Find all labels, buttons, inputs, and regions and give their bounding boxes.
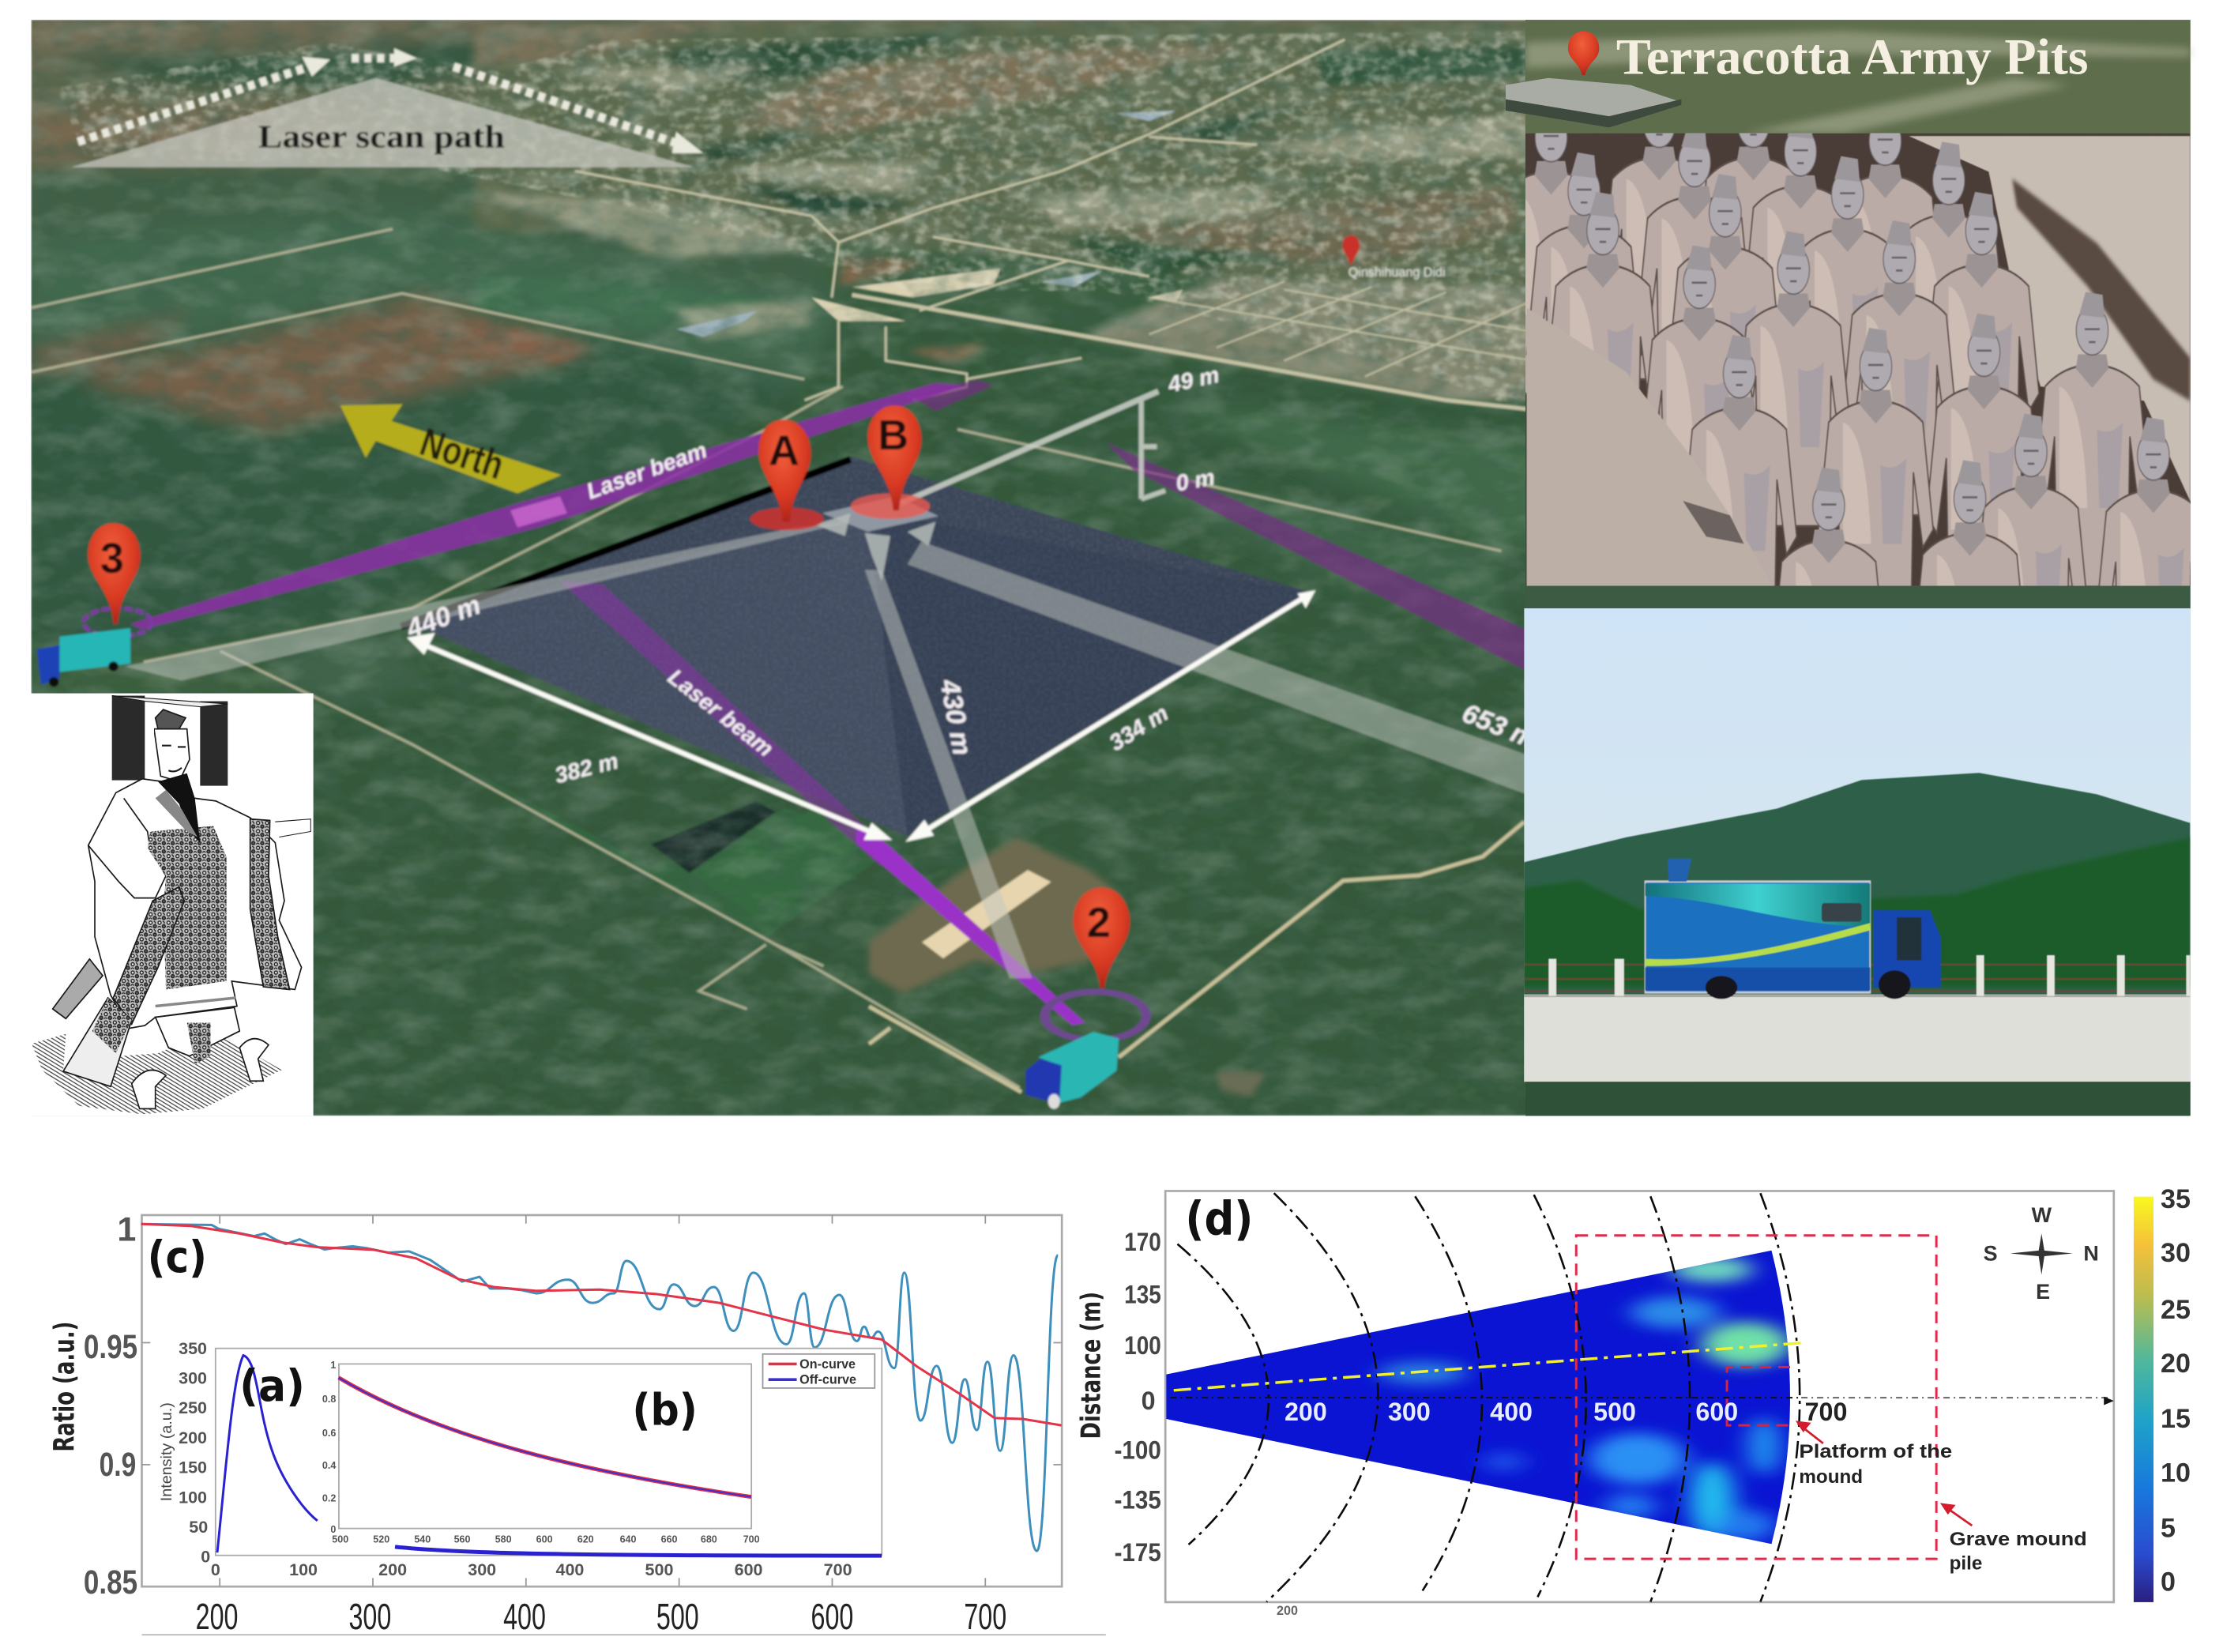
truck box	[1646, 882, 1870, 992]
compass: N	[2083, 1241, 2099, 1265]
pin B	[851, 405, 930, 519]
pin A: A	[769, 427, 799, 475]
inset a tick labels: 250	[179, 1398, 207, 1417]
terracotta title pin	[1568, 31, 1599, 75]
lower crop plots	[493, 784, 891, 935]
inset a tick labels	[179, 1339, 852, 1579]
mound top platform	[822, 496, 938, 532]
colorbar labels: 35	[2161, 1184, 2191, 1214]
inset b chart: 620	[577, 1534, 594, 1545]
inset b tick labels: 1	[330, 1360, 336, 1371]
chart c ticks	[141, 1215, 1062, 1586]
bottom rule	[141, 1634, 1106, 1635]
382 m dimension arrow	[408, 634, 890, 839]
train panel	[63, 998, 132, 1086]
pin B: B	[878, 412, 908, 459]
inset a tick labels: 0	[211, 1560, 220, 1579]
chart c panel letter: (c)	[148, 1232, 207, 1283]
satellite map background	[32, 20, 2191, 1116]
colorbar labels: 15	[2161, 1404, 2191, 1434]
chart d annotations: pile	[1950, 1553, 1982, 1575]
colorbar labels: 10	[2161, 1458, 2191, 1488]
Qinshihuang place marker: Qinshihuang Didi	[1348, 265, 1446, 280]
laser scan path	[71, 48, 703, 167]
compass: E	[2036, 1280, 2050, 1304]
inset b chart: 540	[414, 1534, 431, 1545]
compass: S	[1984, 1241, 1998, 1265]
colorbar labels: 0	[2161, 1567, 2176, 1597]
station 3 truck and pin	[37, 523, 152, 687]
upper right earth bank	[1909, 136, 2190, 501]
inset a signal curve	[217, 1356, 318, 1552]
inset legend: Off-curve	[799, 1373, 856, 1387]
front hem	[156, 1007, 239, 1056]
chart d y labels	[1115, 1228, 1161, 1567]
colorbar labels: 5	[2161, 1513, 2176, 1543]
inset b chart: 660	[661, 1534, 678, 1545]
station 2 airfield	[869, 822, 1524, 1097]
map labels: 0 m	[1174, 465, 1217, 497]
chart c axis labels: 600	[811, 1596, 853, 1637]
laser scan path: Laser scan path	[258, 119, 505, 155]
top strip over photos	[1525, 20, 2191, 134]
roads and town grid	[575, 40, 1757, 435]
bottom map strip	[1525, 1082, 2191, 1116]
beard	[158, 773, 200, 843]
inset a chart: Intensity (a.u.)	[158, 1402, 175, 1501]
inset b tick labels: 0.2	[322, 1493, 336, 1504]
compass	[1984, 1203, 2099, 1304]
station 2 truck and pin: 2	[1087, 899, 1111, 946]
upper farmland and town tones	[474, 24, 1534, 401]
robe body	[88, 779, 302, 1029]
chart c axis labels: 300	[348, 1596, 391, 1637]
inset b tick labels	[322, 1360, 336, 1535]
inset b chart	[321, 1349, 773, 1545]
chart c axis labels: Ratio (a.u.)	[48, 1322, 81, 1452]
chart c axis labels: 700	[964, 1596, 1006, 1637]
colorbar	[2134, 1197, 2153, 1602]
shoes	[132, 1070, 166, 1108]
inset a tick labels: 200	[378, 1560, 407, 1579]
chart d range labels: 400	[1490, 1398, 1533, 1426]
chart d y labels: -175	[1115, 1538, 1161, 1567]
map labels: Laser beam	[663, 664, 778, 762]
map labels: 653 m	[1458, 698, 1540, 755]
inset a tick labels: 300	[179, 1369, 207, 1388]
inset b tick labels: 0.4	[322, 1460, 336, 1471]
map labels: Laser beam	[583, 438, 710, 505]
chart d y labels: 0	[1142, 1387, 1156, 1415]
north arrow: North	[415, 420, 510, 487]
chart d axes lines	[1170, 1342, 2112, 1398]
chart d range labels	[1285, 1398, 1847, 1426]
chart d frame	[1165, 1191, 2114, 1602]
colorbar labels	[2161, 1184, 2191, 1597]
chart c axis labels: 0.95	[84, 1328, 137, 1366]
chart d range labels: 200	[1285, 1398, 1327, 1426]
inset a tick labels: 100	[179, 1488, 207, 1507]
crown panels	[112, 696, 228, 786]
chart c frame	[141, 1215, 1062, 1586]
beam arrowheads	[815, 514, 935, 581]
embroidered sleeve band	[250, 819, 290, 989]
inset b chart: 640	[620, 1534, 637, 1545]
chart d y labels: 170	[1124, 1228, 1161, 1256]
hem hatch	[32, 1034, 282, 1114]
north arrow	[340, 404, 562, 494]
emperor line drawing	[32, 694, 314, 1116]
Qinshihuang place marker	[1343, 235, 1446, 280]
roads left	[32, 229, 1502, 1088]
embroidered center	[148, 826, 227, 989]
inset a tick labels: 400	[556, 1560, 584, 1579]
chart d range labels: 700	[1805, 1398, 1847, 1426]
terracotta title: Terracotta Army Pits	[1616, 28, 2088, 85]
334 m dimension arrow	[908, 591, 1315, 841]
chart d range labels: 500	[1593, 1398, 1636, 1426]
inset a tick labels: 0	[201, 1548, 210, 1567]
chart c axis labels: 1	[117, 1210, 136, 1248]
chart c axis labels: 500	[656, 1596, 699, 1637]
town lightened blotches	[474, 66, 1527, 340]
inset b chart: 700	[743, 1534, 760, 1545]
inset legend: On-curve	[799, 1357, 856, 1372]
inset b curves	[339, 1378, 751, 1497]
far purple laser beam	[908, 380, 1545, 680]
black ridge line	[401, 459, 851, 627]
map labels: 382 m	[552, 749, 621, 788]
pin A	[750, 420, 824, 530]
chart d range arcs	[1177, 1193, 1800, 1601]
inset b tick labels: 0.8	[322, 1394, 336, 1405]
compass: W	[2032, 1203, 2052, 1227]
distant terrain band	[32, 20, 2190, 295]
grass texture	[32, 20, 1534, 1116]
photo: terracotta warriors	[1525, 133, 2191, 586]
strip between photos	[1525, 585, 2191, 608]
inset a tick labels: 100	[289, 1560, 318, 1579]
inset a tick labels: 700	[824, 1560, 852, 1579]
terrain texture	[32, 21, 1525, 1114]
inset a chart	[158, 1339, 882, 1579]
inset a tick labels: 350	[179, 1339, 207, 1358]
front sash	[113, 887, 184, 1024]
hand	[275, 819, 310, 837]
inset a panel letter: (a)	[239, 1360, 305, 1412]
chart c axis labels: 200	[196, 1596, 239, 1637]
chart c raw ratio curve	[141, 1224, 1058, 1551]
chart d panel letter: (d)	[1185, 1191, 1253, 1246]
map labels: 334 m	[1105, 701, 1173, 756]
chart d y labels: 100	[1124, 1331, 1161, 1360]
chart c smoothed curve	[141, 1224, 1062, 1425]
gray range beams	[125, 521, 1525, 978]
mound pyramid	[411, 457, 1311, 837]
inset a tick labels: 600	[735, 1560, 763, 1579]
chart d y labels: 135	[1124, 1280, 1161, 1308]
inset a tick labels: 200	[179, 1428, 207, 1447]
map labels: 440 m	[402, 590, 484, 645]
chart d range labels: 600	[1695, 1398, 1738, 1426]
town texture	[32, 20, 1525, 417]
colorbar labels: 25	[2161, 1295, 2191, 1325]
map labels	[402, 363, 1540, 788]
chart d annotations	[1799, 1441, 2087, 1575]
chart d annotations: mound	[1799, 1466, 1863, 1488]
map labels: 49 m	[1165, 363, 1221, 398]
station 3 truck and pin: 3	[100, 535, 124, 582]
left sleeve fold	[88, 798, 166, 898]
chart d annotations: Platform of the	[1799, 1441, 1952, 1462]
laser beam 3	[130, 383, 964, 630]
chart c axis labels	[48, 1210, 1006, 1637]
inset b chart: 680	[701, 1534, 717, 1545]
face and crown	[154, 729, 190, 781]
strip highlights	[1525, 31, 2191, 134]
collar	[156, 790, 197, 837]
photo: mobile lidar truck and mound	[1524, 608, 2191, 1082]
chart c axis labels: 400	[503, 1596, 546, 1637]
inset b tick labels: 0.6	[322, 1428, 336, 1439]
inset legend	[763, 1354, 875, 1388]
inset a tick labels: 300	[468, 1560, 496, 1579]
chart d y labels: -100	[1115, 1436, 1161, 1465]
colorbar labels: 30	[2161, 1238, 2191, 1268]
chart d heat wedge	[1166, 1251, 1790, 1544]
chart d range labels: 300	[1388, 1398, 1431, 1426]
chart d y labels: -135	[1115, 1485, 1161, 1514]
inset b tick labels: 0	[330, 1524, 336, 1535]
inset a tick labels: 500	[645, 1560, 673, 1579]
left farmland fields	[32, 20, 1525, 700]
inset a tick labels: 150	[179, 1458, 207, 1477]
truck cab	[1873, 910, 1941, 988]
inset b chart: 580	[495, 1534, 512, 1545]
grave mound pile box	[1576, 1236, 1936, 1559]
laser beam 2	[560, 581, 908, 865]
left earth bank	[1526, 307, 1772, 587]
axis arrowhead	[2104, 1397, 2114, 1405]
cut off range label: 200	[1277, 1604, 1298, 1618]
inset a decay tail	[395, 1547, 882, 1556]
terracotta pit building	[1506, 78, 1681, 128]
train left	[53, 959, 103, 1018]
chart d annotation arrows	[1798, 1422, 1972, 1526]
colorbar labels: 20	[2161, 1349, 2191, 1379]
inset b chart: 600	[536, 1534, 553, 1545]
chart c axis labels: 0.9	[100, 1446, 136, 1484]
inset a tick labels: 50	[189, 1518, 208, 1537]
49 m height bracket	[901, 391, 1165, 503]
chart d y axis title: Distance (m)	[1076, 1292, 1108, 1439]
chart c axis labels: 0.85	[84, 1564, 137, 1601]
inset b panel letter: (b)	[632, 1385, 698, 1436]
station 2 truck and pin	[1025, 887, 1146, 1109]
inset b chart: 500	[332, 1534, 348, 1545]
map labels: 430 m	[934, 676, 977, 758]
inset b chart: 560	[454, 1534, 471, 1545]
chart d annotations: Grave mound	[1950, 1529, 2087, 1550]
inset b chart: 520	[373, 1534, 389, 1545]
